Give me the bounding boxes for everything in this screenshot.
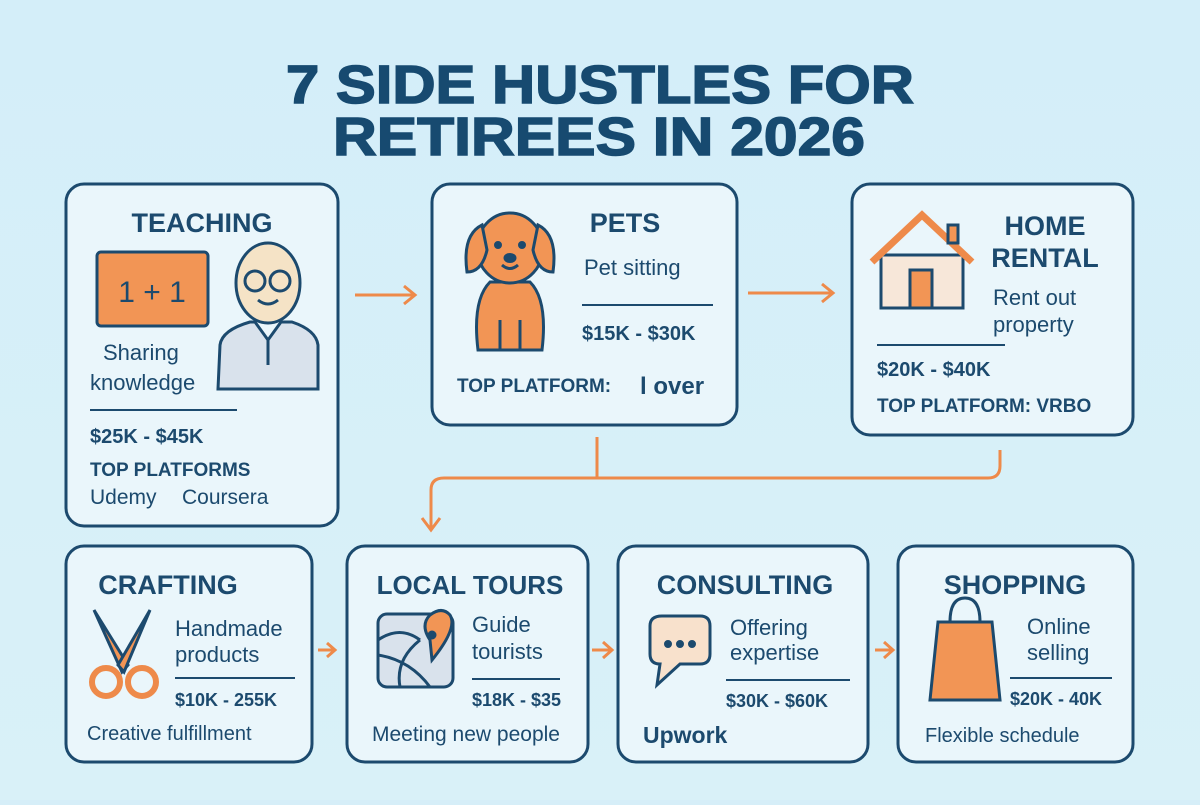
panel: consulting: Offering — [730, 615, 808, 640]
panel: crafting: Handmade — [175, 616, 283, 641]
icon: chalkboard: 1 + 1 — [118, 276, 186, 309]
title — [286, 55, 914, 167]
panel: consulting: expertise — [730, 640, 819, 665]
panel: crafting: Creative fulfillment — [87, 723, 252, 745]
panel: local tours — [347, 546, 588, 762]
panel: home rental: Rent out — [993, 285, 1076, 310]
arrow: crafting to tours — [318, 643, 335, 657]
arrow: teaching to pets — [355, 286, 415, 304]
panel: teaching: knowledge — [90, 370, 195, 395]
panel: consulting: Upwork — [643, 722, 728, 748]
panel: home rental: property — [993, 312, 1074, 337]
arrow: consulting to shopping — [875, 642, 893, 658]
panel: pets — [432, 184, 737, 425]
panel: shopping: selling — [1027, 640, 1089, 665]
icon: speech bubble — [650, 616, 710, 685]
panel: teaching: Coursera — [182, 486, 269, 509]
panel: teaching: TEACHING — [132, 208, 272, 238]
panel: crafting: CRAFTING — [98, 570, 238, 600]
panel: shopping — [898, 546, 1133, 762]
panel: pets: PETS — [590, 208, 660, 238]
icon: scissors — [92, 610, 156, 696]
panel: home rental — [852, 184, 1133, 435]
panel: home rental: $20K - $40K — [877, 359, 991, 381]
icon: dog — [466, 213, 554, 350]
icon: house — [872, 215, 972, 308]
panel: shopping: SHOPPING — [944, 570, 1086, 600]
icon: chalkboard — [97, 252, 208, 326]
panel: crafting: $10K - 255K — [175, 690, 277, 710]
panel: pets: l over — [640, 373, 704, 400]
panel: local tours: $18K - $35 — [472, 690, 561, 710]
panel: shopping: Flexible schedule — [925, 725, 1080, 747]
panel: home rental: RENTAL — [991, 243, 1099, 273]
arrow: connector to bottom row — [422, 437, 1000, 530]
panel: crafting: products — [175, 642, 259, 667]
panel: consulting: $30K - $60K — [726, 691, 828, 711]
panel: pets: $15K - $30K — [582, 323, 696, 345]
title: 7 SIDE HUSTLES FOR — [286, 55, 914, 115]
panel: local tours: LOCAL TOURS — [377, 570, 563, 600]
panel: home rental: HOME — [1004, 211, 1086, 241]
panel: pets: TOP PLATFORM: — [457, 376, 611, 397]
panel: teaching — [66, 184, 338, 526]
panel: teaching: TOP PLATFORMS — [90, 460, 250, 481]
title: RETIREES IN 2026 — [333, 107, 865, 167]
panel: local tours: tourists — [472, 639, 543, 664]
panel: local tours: Meeting new people — [372, 723, 560, 746]
panel: crafting — [66, 546, 312, 762]
panel: home rental: TOP PLATFORM: VRBO — [877, 396, 1091, 417]
panel: consulting — [618, 546, 868, 762]
panel: pets: Pet sitting — [584, 255, 681, 280]
arrow: tours to consulting — [592, 642, 612, 658]
panel: shopping: $20K - 40K — [1010, 689, 1102, 709]
icon: map — [378, 610, 453, 687]
icon: shopping bag — [930, 598, 1000, 700]
panel: local tours: Guide — [472, 612, 531, 637]
panel: teaching: Sharing — [103, 340, 179, 365]
panel: shopping: Online — [1027, 614, 1091, 639]
panel: consulting: CONSULTING — [657, 570, 833, 600]
panel: teaching: Udemy — [90, 486, 157, 509]
panel: teaching: $25K - $45K — [90, 426, 204, 448]
arrow: pets to home rental — [748, 284, 833, 302]
icon: teacher — [218, 243, 318, 389]
